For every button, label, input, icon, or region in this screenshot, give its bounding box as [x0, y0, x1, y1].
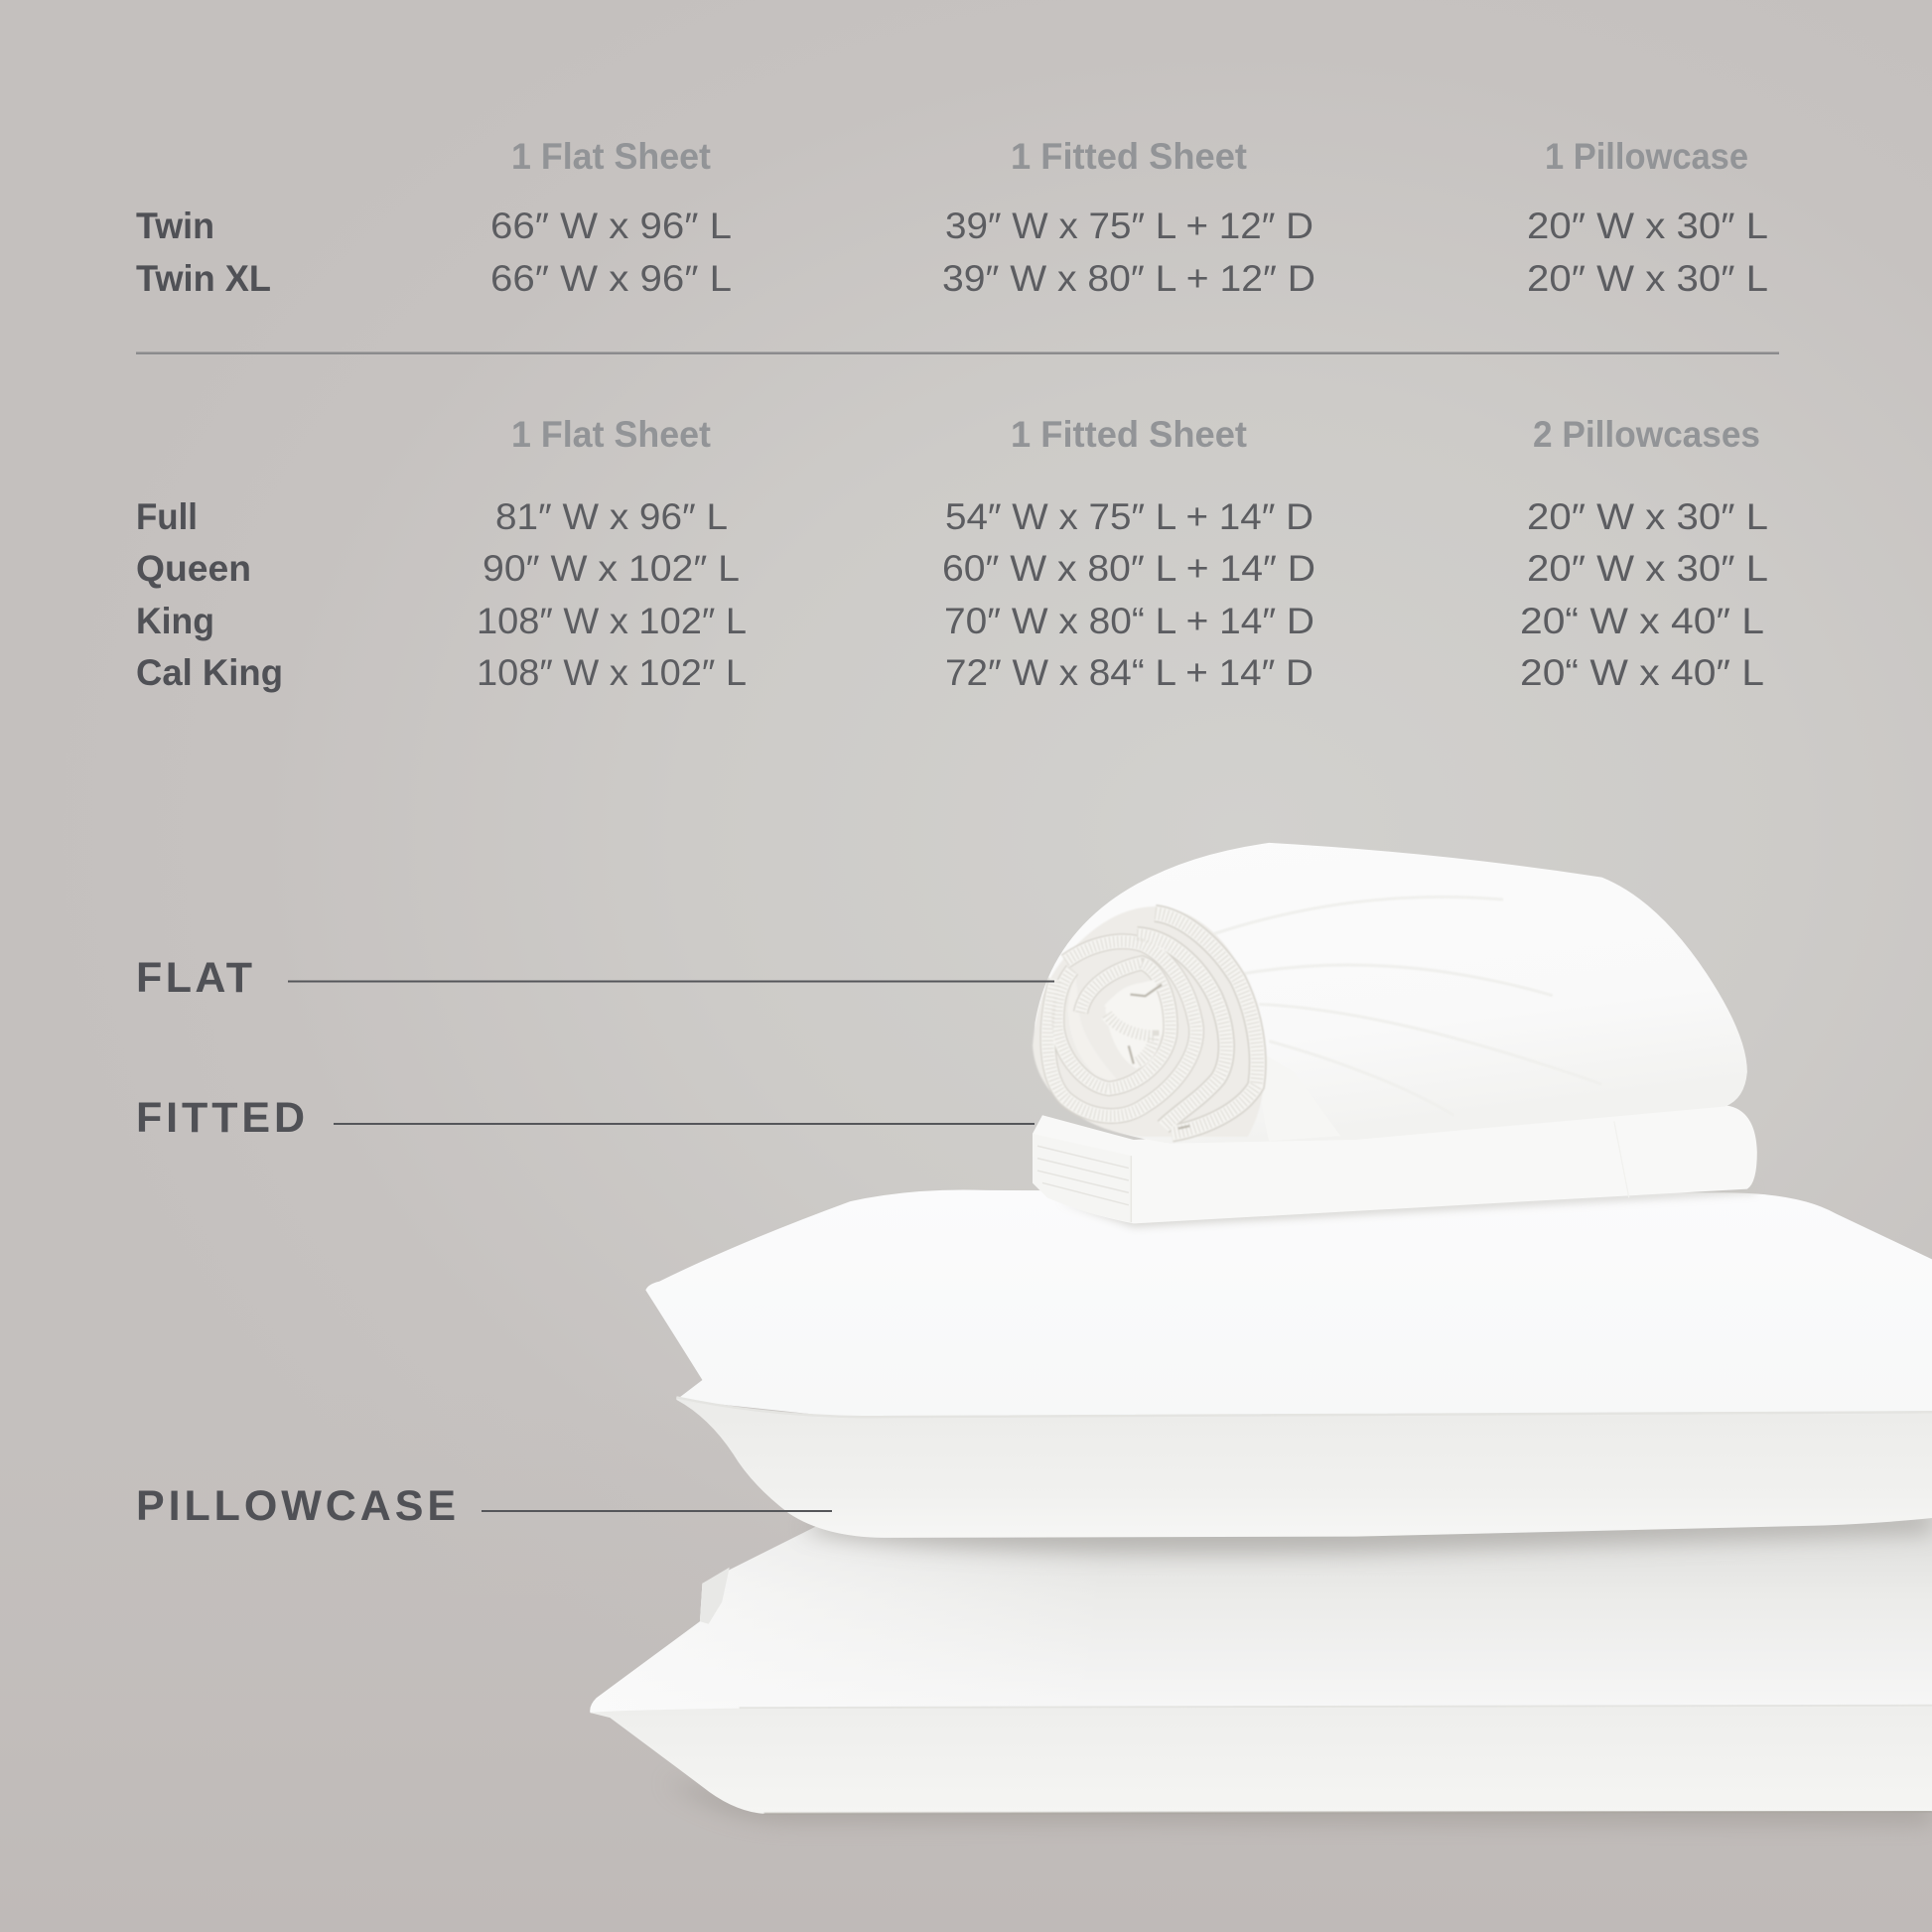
row: Cal King: Cal King — [136, 652, 283, 693]
row: Twin XL: Twin XL — [136, 258, 271, 299]
row: Queen: 60″ W x 80″ L + 14″ D — [942, 548, 1315, 589]
column headers: twin — [511, 136, 1748, 177]
row: Twin: 20″ W x 30″ L — [1527, 206, 1768, 246]
size table: full and larger sizes — [136, 414, 1768, 693]
fitted sheet: rolled — [1033, 843, 1747, 1144]
row: Full: 20″ W x 30″ L — [1527, 496, 1768, 537]
column headers: full and larger: 1 Flat Sheet — [511, 414, 711, 455]
row: Twin XL: 20″ W x 30″ L — [1527, 258, 1768, 299]
row: Queen: 90″ W x 102″ L — [483, 548, 740, 589]
row: King: 108″ W x 102″ L — [477, 601, 747, 641]
column headers: twin: 1 Pillowcase — [1545, 136, 1748, 177]
ring bodies — [1047, 913, 1258, 1134]
top pillow — [645, 1190, 1932, 1538]
callout: pillowcase: PILLOWCASE — [136, 1482, 456, 1530]
elastic spiral — [1033, 906, 1264, 1137]
row: Cal King: 20“ W x 40″ L — [1520, 652, 1764, 693]
column headers: twin: 1 Fitted Sheet — [1011, 136, 1247, 177]
row: Twin — [136, 206, 1768, 246]
photo: stacked bedding — [590, 843, 1932, 1824]
row: Twin: Twin — [136, 206, 214, 246]
row: Queen — [136, 548, 1768, 589]
row: Queen: Queen — [136, 548, 251, 589]
shadow under folded sheet — [1059, 1185, 1756, 1227]
shadow cast by top pillow — [801, 1509, 1932, 1553]
row: Cal King: 108″ W x 102″ L — [477, 652, 747, 693]
row: King: King — [136, 601, 214, 641]
row: Twin: 39″ W x 75″ L + 12″ D — [945, 206, 1313, 246]
row: Twin XL — [136, 258, 1768, 299]
row: King — [136, 601, 1764, 641]
row: King: 70″ W x 80“ L + 14″ D — [944, 601, 1314, 641]
row: King: 20“ W x 40″ L — [1520, 601, 1764, 641]
row: Twin XL: 66″ W x 96″ L — [490, 258, 732, 299]
flat sheet: folded — [1033, 1105, 1757, 1223]
callout: fitted: FITTED — [136, 1094, 305, 1142]
row: Full: 54″ W x 75″ L + 14″ D — [945, 496, 1313, 537]
row: Twin XL: 39″ W x 80″ L + 12″ D — [942, 258, 1315, 299]
column headers: twin: 1 Flat Sheet — [511, 136, 711, 177]
row: Cal King — [136, 652, 1764, 693]
creases — [1129, 985, 1189, 1129]
elastic pleats — [1047, 913, 1258, 1134]
column headers: full and larger: 2 Pillowcases — [1533, 414, 1760, 455]
shadow under stack — [665, 1780, 1932, 1824]
row: Twin: 66″ W x 96″ L — [490, 206, 732, 246]
callout: flat: FLAT — [136, 954, 252, 1002]
row: Full — [136, 496, 1768, 537]
row: Cal King: 72″ W x 84“ L + 14″ D — [945, 652, 1313, 693]
column headers: full and larger: 1 Fitted Sheet — [1011, 414, 1247, 455]
column headers: full and larger — [511, 414, 1760, 455]
ring shadows — [1047, 913, 1258, 1134]
row: Full: 81″ W x 96″ L — [495, 496, 728, 537]
bottom pillow — [590, 1509, 1932, 1814]
size table: twin sizes — [136, 136, 1768, 299]
row: Queen: 20″ W x 30″ L — [1527, 548, 1768, 589]
row: Full: Full — [136, 496, 198, 537]
